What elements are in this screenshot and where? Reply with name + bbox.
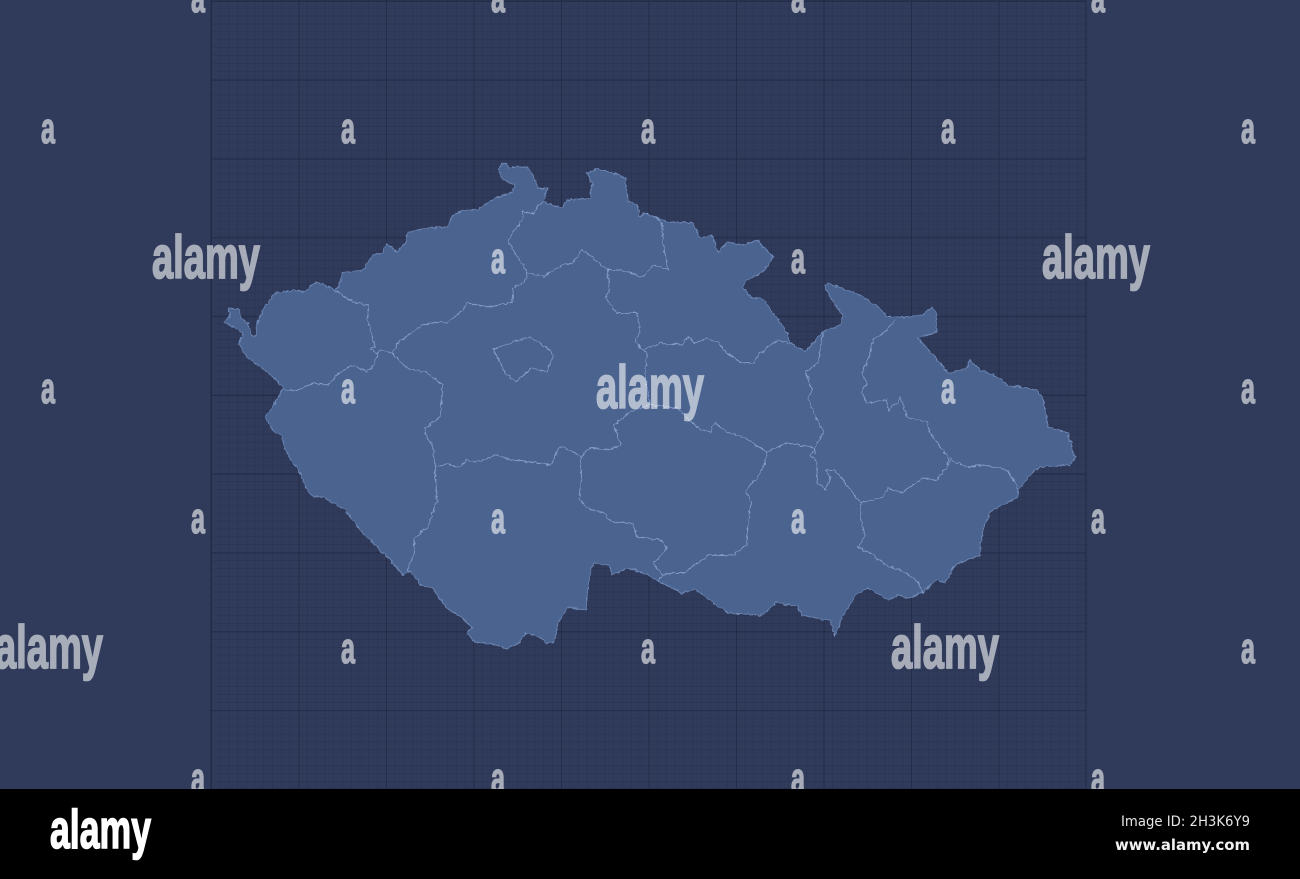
footer logo: alamy — [50, 798, 151, 860]
watermark: small letters: a — [791, 754, 805, 803]
watermark: small letters: a — [941, 364, 955, 413]
watermark: small letters: a — [791, 494, 805, 543]
watermark: large logos: alamy — [891, 614, 999, 681]
watermark: small letters: a — [641, 104, 655, 153]
watermark: small letters: a — [641, 624, 655, 673]
watermark: small letters: a — [191, 754, 205, 803]
watermark: small letters: a — [1241, 104, 1255, 153]
region: Prague — [493, 337, 553, 382]
watermark: large logos — [0, 224, 1150, 681]
website: www.alamy.com — [1115, 836, 1250, 854]
watermark: large logos: alamy — [0, 614, 103, 681]
footer bar — [0, 789, 1300, 879]
grid panel — [211, 0, 1086, 789]
watermark: small letters: a — [941, 104, 955, 153]
watermark: small letters: a — [341, 364, 355, 413]
watermark: large logos: alamy — [152, 224, 260, 291]
watermark: small letters: a — [191, 494, 205, 543]
region borders — [283, 202, 1018, 592]
watermark: large logos: alamy — [1042, 224, 1150, 291]
watermark: small letters: a — [341, 624, 355, 673]
watermark: small letters: a — [1091, 754, 1105, 803]
map: Czech Republic regions — [225, 163, 1075, 649]
watermark: small letters: a — [1241, 624, 1255, 673]
watermark: small letters: a — [41, 104, 55, 153]
watermark: small letters: a — [1241, 364, 1255, 413]
watermark: small letters: a — [1091, 494, 1105, 543]
watermark: small letters: a — [41, 364, 55, 413]
watermark: small letters: a — [491, 494, 505, 543]
watermark: small letters: a — [491, 754, 505, 803]
watermark: small letters: a — [341, 104, 355, 153]
country outline — [225, 163, 1075, 649]
watermark: small letters: a — [491, 234, 505, 283]
image id: Image ID: 2H3K6Y9 — [1121, 814, 1250, 830]
watermark: large logos: alamy — [596, 354, 704, 421]
watermark: small letters: a — [791, 234, 805, 283]
